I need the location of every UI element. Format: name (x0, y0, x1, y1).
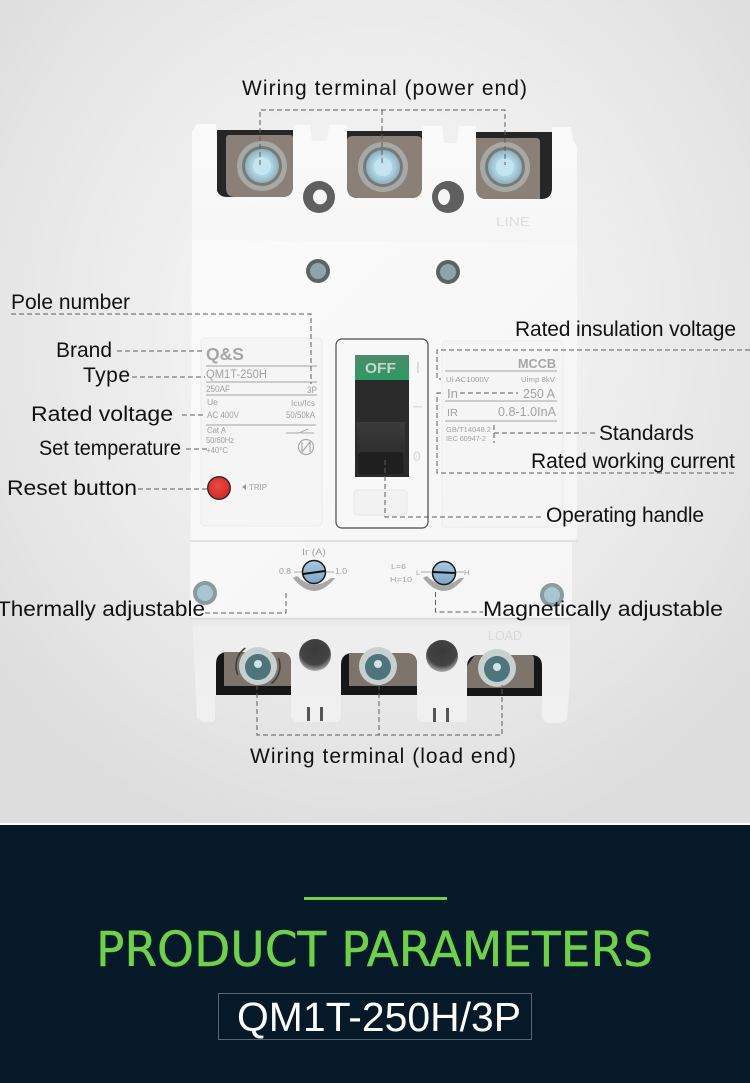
terminal window middle (347, 131, 422, 198)
label plate left: 3P (307, 385, 317, 395)
model box: QM1T-250H/3P (237, 994, 521, 1040)
switch (336, 339, 428, 528)
callout: rated voltage: Rated voltage (31, 403, 173, 426)
label plate right: MCCB (518, 357, 556, 371)
label plate right: In (447, 387, 458, 401)
terminal window lower middle (341, 647, 417, 695)
label plate right: Ui AC1000V (446, 375, 489, 384)
LOAD marking: LOAD (488, 628, 522, 643)
reset button (207, 476, 231, 500)
callout: type (83, 364, 205, 387)
callout: wiring terminal load end: Wiring terminal (load end) (250, 745, 516, 768)
magnetic adjustment dial: L (416, 568, 420, 577)
callout: rated working current (437, 393, 735, 473)
label plate left: QM1T-250H (206, 369, 267, 381)
position marks: 0 (413, 448, 421, 464)
mounting holes top (303, 181, 464, 213)
mounting holes bottom (299, 639, 458, 672)
cover screws (306, 259, 460, 284)
callout: wiring terminal power end (242, 77, 527, 165)
label plate left: +40°C (206, 445, 228, 455)
label plate left: TRIP (249, 483, 267, 492)
thermal adjustment dial: 1.0 (335, 567, 348, 576)
callout: thermally adjustable (0, 593, 286, 621)
label plate right: GB/T14048.2 (446, 425, 491, 434)
LINE marking: LINE (496, 214, 530, 229)
callout: operating handle: Operating handle (546, 504, 704, 527)
thermal adjustment dial (279, 547, 348, 591)
callout: magnetically adjustable (436, 592, 723, 621)
trip marker (242, 484, 246, 490)
label plate left: 250AF (206, 384, 230, 394)
middle cover (190, 240, 578, 618)
magnetic adjustment dial: L=6 (391, 562, 406, 571)
terminal window left (217, 130, 293, 197)
callout: wiring terminal load end (250, 685, 516, 768)
label plate left (201, 338, 322, 526)
callout: standards (494, 422, 694, 445)
recess (354, 490, 407, 515)
panel: product parameters banner (0, 825, 750, 1083)
accent line (304, 897, 447, 900)
callout: operating handle (385, 460, 704, 527)
callout: rated working current: Rated working current (531, 450, 735, 473)
OFF indicator (355, 355, 409, 380)
label plate left: Ue (207, 397, 218, 407)
position marks (413, 362, 422, 464)
label plate left: Cat A (207, 425, 226, 435)
magnetic adjustment dial: H (464, 568, 469, 577)
lower body section (192, 614, 570, 723)
callout: rated insulation voltage: Rated insulation voltage (515, 318, 736, 341)
label plate right (442, 341, 563, 527)
top body section (192, 124, 577, 246)
thermal adjustment dial: Ir (A) (302, 547, 326, 558)
side screws (193, 581, 564, 607)
operating handle (356, 422, 405, 475)
label plate right: IEC 60947-2 (446, 434, 486, 443)
certification mark (298, 440, 314, 454)
circuit breaker product (190, 124, 578, 723)
background (0, 0, 750, 823)
tab slots (307, 707, 449, 722)
callout: pole number (11, 291, 311, 384)
thermal adjustment dial: 0.8 (279, 567, 292, 576)
terminal window lower left (216, 644, 291, 695)
OFF indicator: OFF (365, 360, 396, 377)
label plate right: Uimp 8kV (521, 375, 555, 384)
terminal window right (476, 132, 552, 199)
callout: brand: Brand (56, 339, 112, 362)
switch symbol (286, 429, 314, 433)
callout: standards: Standards (599, 422, 694, 445)
label plate right: 250 A (523, 387, 556, 401)
switch window (355, 355, 409, 477)
heading: PRODUCT PARAMETERS (96, 922, 653, 978)
callout: set temperature: Set temperature (39, 437, 181, 460)
brand logo: Q&S (206, 344, 244, 364)
callout: type: Type (83, 364, 130, 387)
callout: rated insulation voltage (437, 318, 750, 379)
label plate right: IR (447, 408, 458, 419)
magnetic adjustment dial (390, 562, 469, 591)
callout: wiring terminal power end: Wiring terminal (power end) (242, 77, 527, 100)
callout: magnetically adjustable: Magnetically adjustable (483, 598, 723, 621)
label plate right: 0.8-1.0InA (498, 405, 557, 419)
label plate left: 50/50kA (286, 410, 315, 420)
white separator (0, 823, 750, 825)
callout: thermally adjustable: Thermally adjustable (0, 598, 205, 621)
label plate left: Icu/Ics (291, 398, 315, 408)
magnetic adjustment dial: H=10 (390, 575, 412, 584)
callout: pole number: Pole number (11, 291, 130, 314)
terminal window lower right (467, 649, 542, 696)
label plate left: 50/60Hz (206, 435, 234, 445)
label plate left: AC 400V (207, 410, 239, 420)
callout: reset button: Reset button (7, 477, 137, 500)
